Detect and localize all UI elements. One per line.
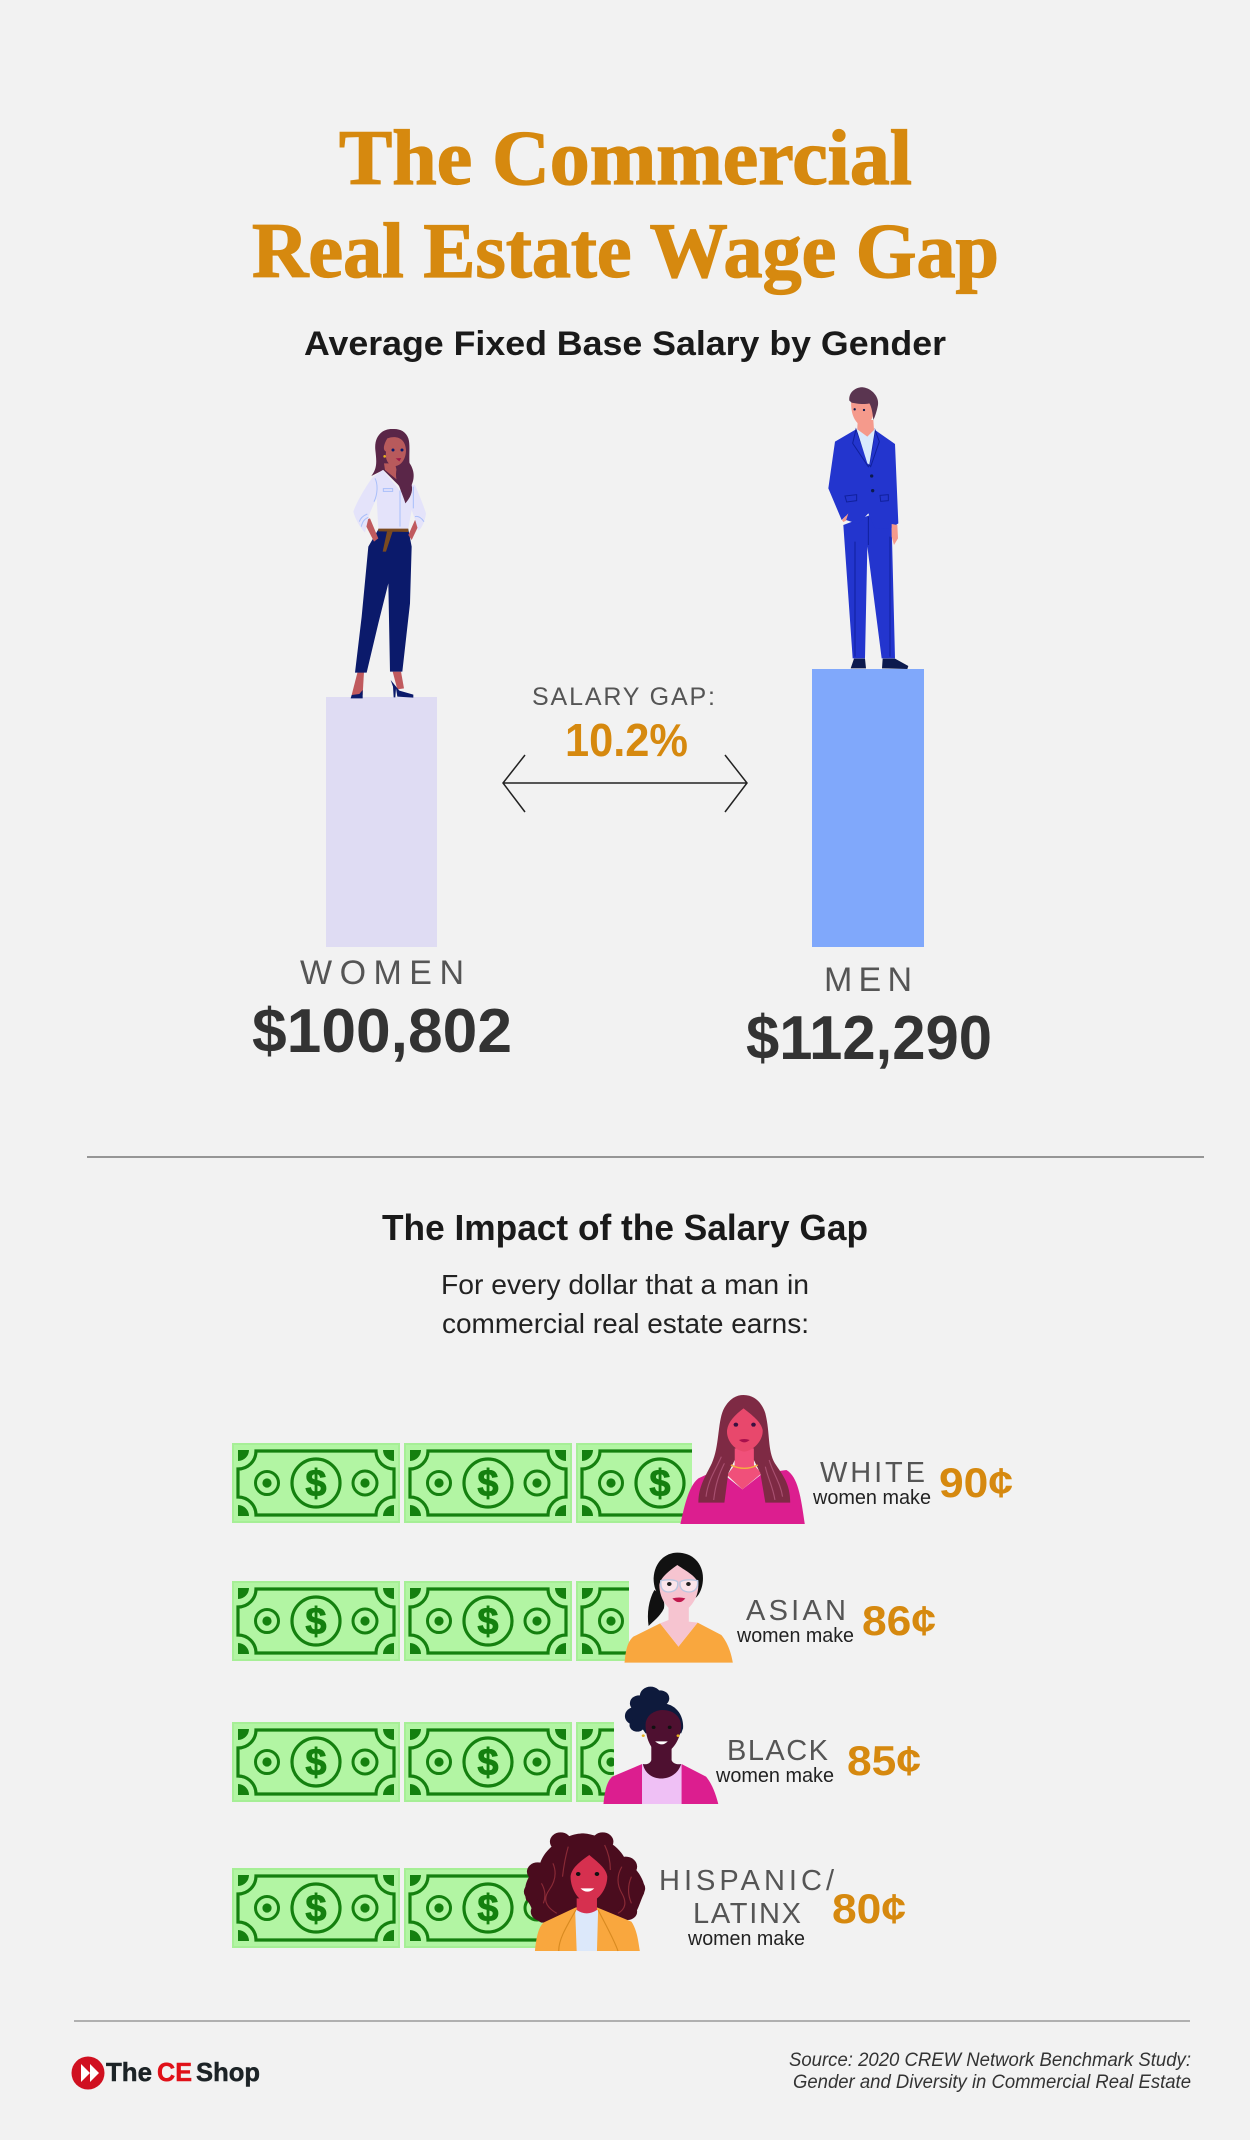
icon: man standing [828,387,908,669]
value: 86 cents: 86¢ [862,1597,936,1644]
dollar bills: $ [305,1601,327,1643]
portrait: white woman [680,1395,805,1524]
label: white women make: WHITE [820,1457,925,1489]
title: The Commercial [339,114,912,201]
dollar bills: $ [477,1742,499,1784]
title: Real Estate Wage Gap [252,207,999,294]
label: asian women make: women make [736,1625,854,1647]
dollar bills: $ [477,1463,499,1505]
row: asian women 86 cents [232,1553,936,1663]
bar: women [326,697,437,947]
row: hispanic latinx women 80 cents [232,1832,906,1951]
row: white women 90 cents [232,1395,1013,1524]
subtitle: Average Fixed Base Salary by Gender [304,325,946,363]
portrait: asian woman [625,1553,733,1663]
dollar bills [232,1868,572,1948]
label: hispanic latinx women make: HISPANIC/ [659,1865,835,1897]
dollar bills [232,1581,744,1661]
women salary label [252,954,512,1066]
source note: Source: 2020 CREW Network Benchmark Study: [789,2050,1191,2071]
dollar bills: $ [477,1888,499,1930]
arrow: gap between bars [503,755,747,812]
label: white women make [812,1457,931,1509]
salary gap callout [503,683,747,812]
label: hispanic latinx women make: women make [687,1928,805,1950]
salary gap label: SALARY GAP: [532,683,715,711]
row: black women 85 cents [232,1687,921,1804]
source note [789,2050,1191,2093]
label: hispanic latinx women make: LATINX [693,1898,801,1930]
women salary label: $100,802 [252,997,512,1066]
logo: The CE Shop [72,2056,260,2090]
women salary label: WOMEN [300,954,464,992]
dollar bills: $ [305,1463,327,1505]
value: 85 cents: 85¢ [847,1737,921,1784]
logo: The CE Shop: The [106,2057,152,2087]
intro text: For every dollar that a man in [441,1269,809,1300]
label: asian women make [736,1595,854,1647]
dollar bills: $ [305,1742,327,1784]
label: asian women make: ASIAN [746,1595,846,1627]
salary gap value: 10.2% [565,714,688,766]
label: hispanic latinx women make [659,1865,835,1950]
value: 90 cents: 90¢ [939,1459,1013,1506]
label: black women make: BLACK [727,1735,829,1767]
portrait: hispanic woman [524,1832,645,1951]
dollar bills [232,1443,744,1523]
dollar bills: $ [649,1463,671,1505]
icon: woman standing [351,429,426,698]
logo: The CE Shop: Shop [196,2057,260,2087]
panel: salary by gender [252,387,992,1073]
dollar bills: $ [305,1888,327,1930]
title [252,114,999,294]
men salary label [746,961,992,1073]
value: 80 cents: 80¢ [832,1885,906,1932]
logo: The CE Shop: CE [157,2057,192,2087]
label: black women make: women make [715,1765,834,1787]
bar: men [812,669,924,947]
intro text: commercial real estate earns: [442,1308,809,1339]
portrait: black woman [603,1687,718,1804]
men salary label: MEN [824,961,912,999]
men salary label: $112,290 [746,1004,992,1073]
dollar bills [232,1722,744,1802]
source note: Gender and Diversity in Commercial Real Estate [793,2072,1191,2093]
label: black women make [715,1735,834,1787]
dollar bills: $ [477,1601,499,1643]
intro text [441,1269,809,1339]
heading: impact of the salary gap: The Impact of the Salary Gap [382,1207,868,1248]
label: white women make: women make [812,1487,931,1509]
